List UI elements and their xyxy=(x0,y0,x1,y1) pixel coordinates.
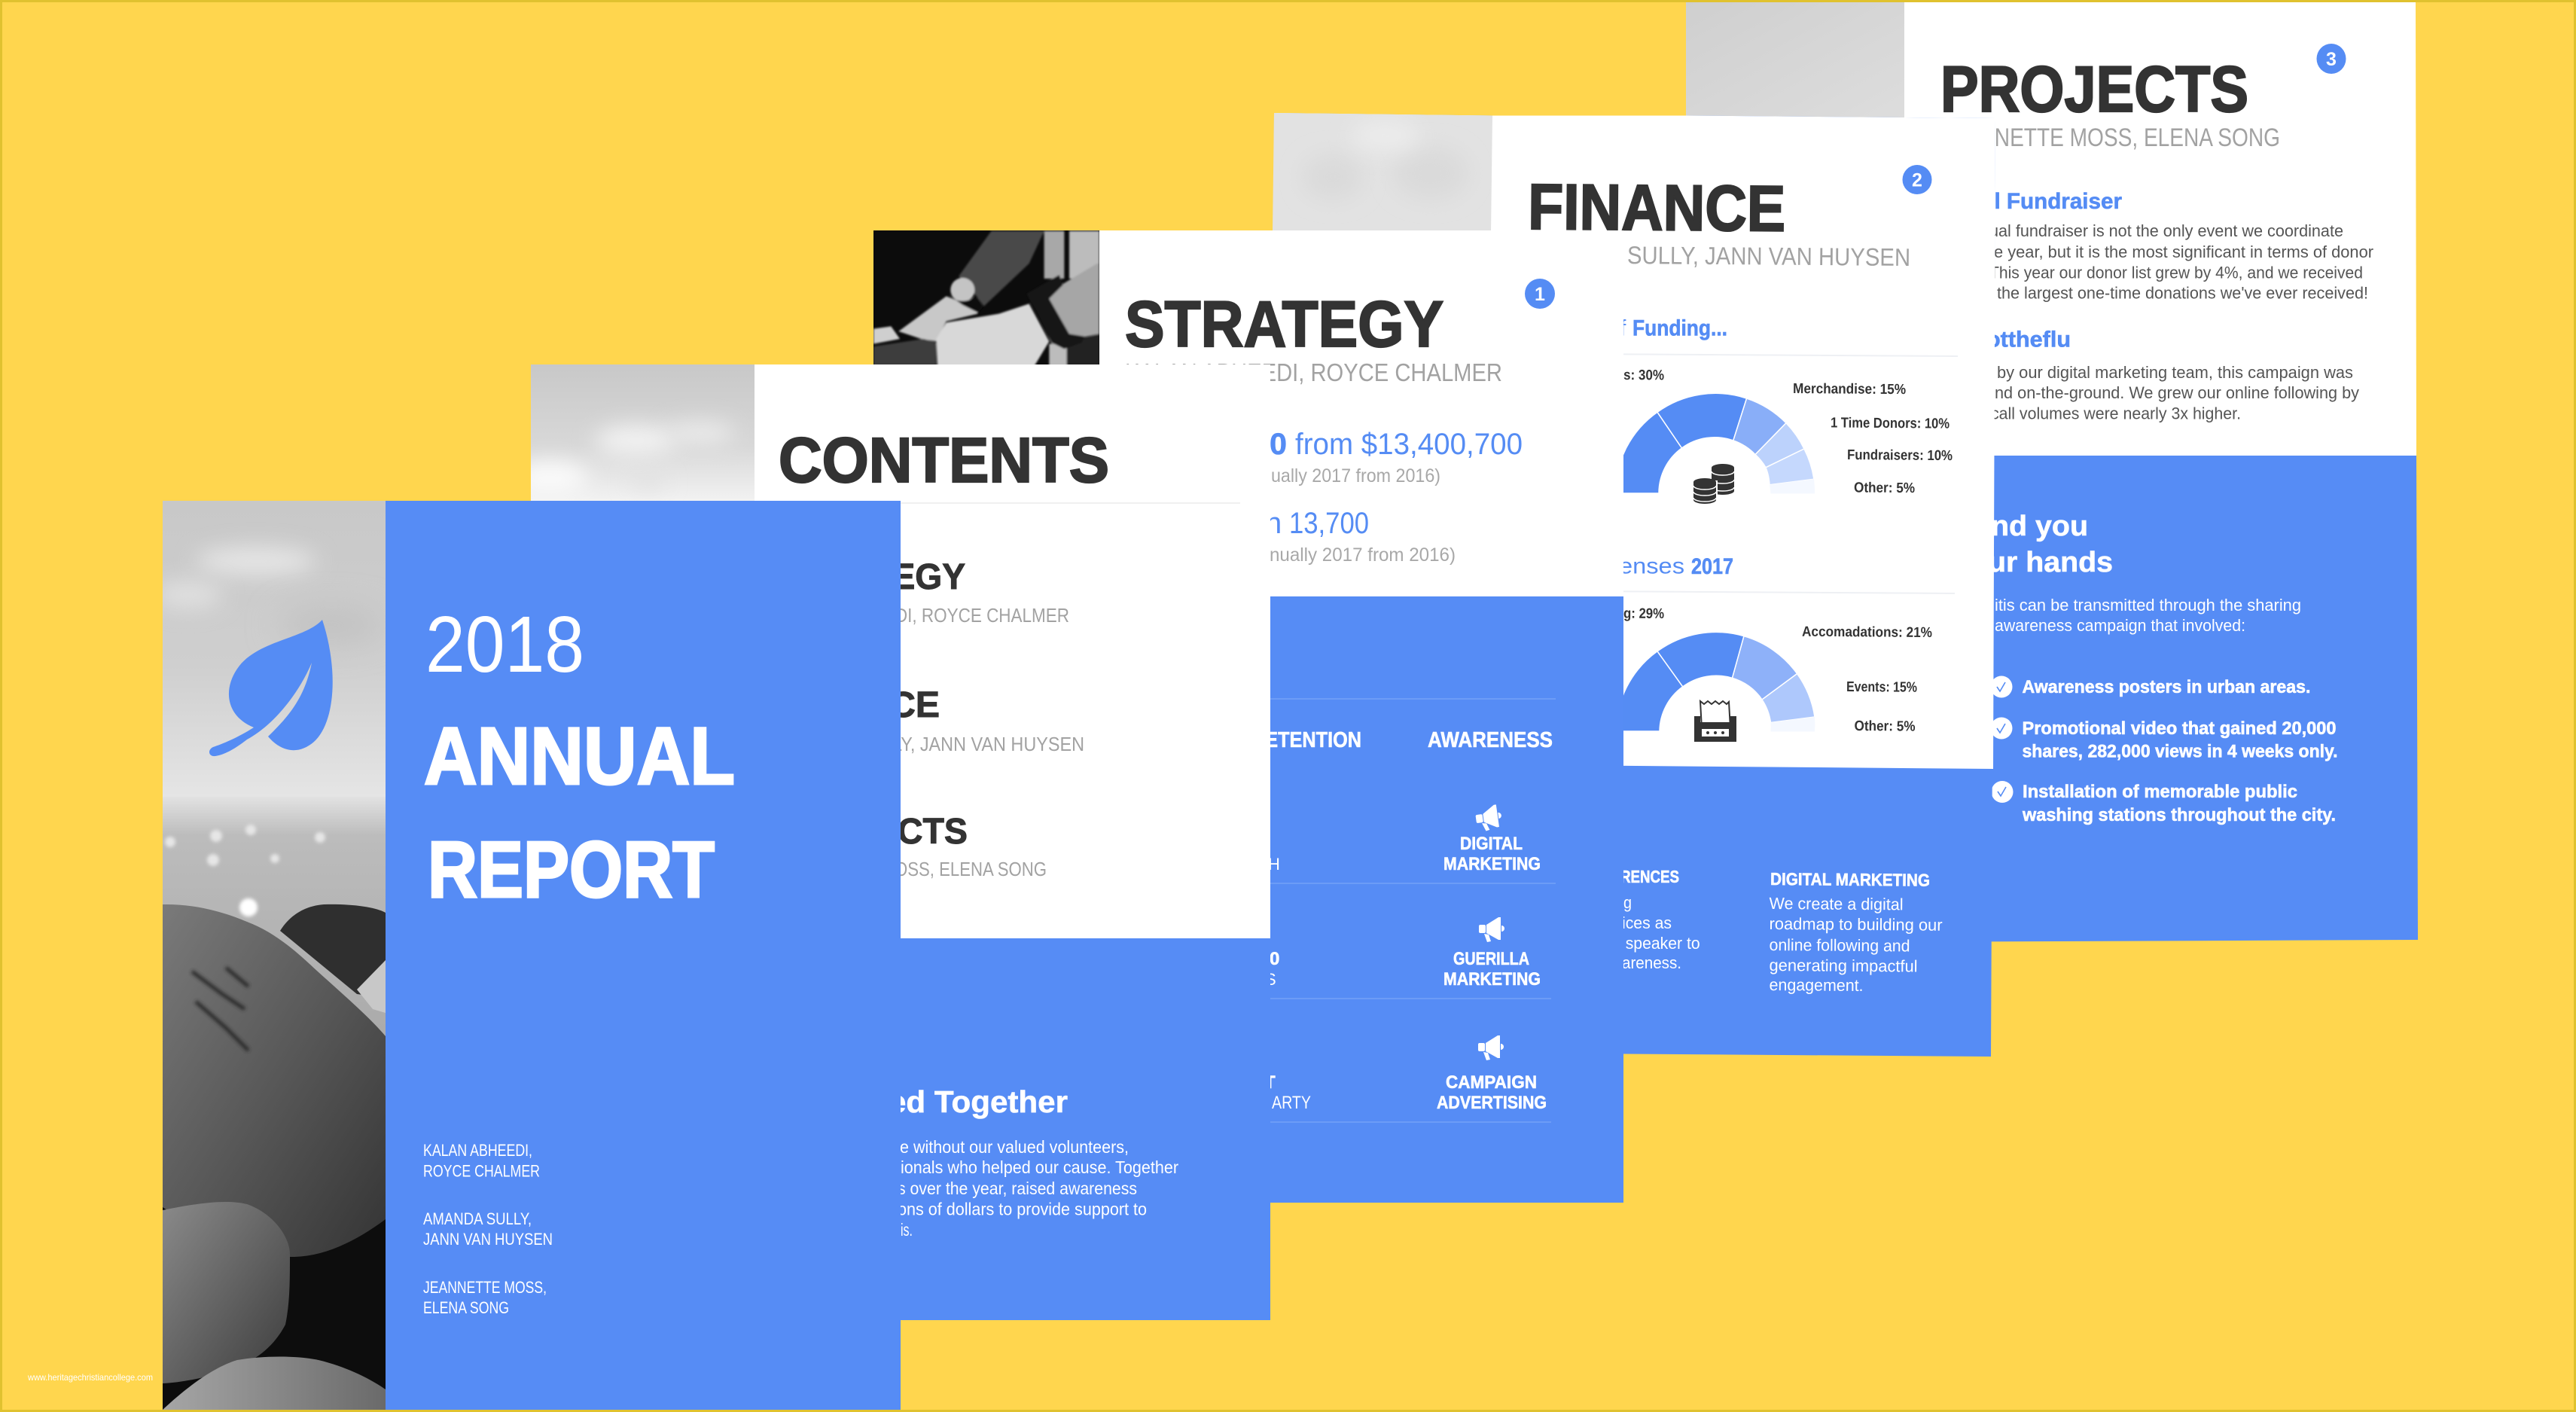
checklist: Awareness posters in urban areas. xyxy=(2023,677,2310,697)
annual fundraiser block: the largest one-time donations we've ever received! xyxy=(1997,283,2368,302)
retention fragments: T xyxy=(1264,1072,1276,1093)
icon: leaf logo xyxy=(209,620,333,756)
number badge 1: 1 xyxy=(1535,284,1545,305)
heading: expenses 2017: enses xyxy=(1619,554,1684,578)
annual fundraiser block: al Fundraiser xyxy=(1982,189,2122,214)
stat: donors total: 13,700 xyxy=(1289,507,1369,540)
strategy authors: KALAN ABHEEDI, ROYCE CHALMER xyxy=(1125,358,1502,386)
number badge 3 xyxy=(2316,44,2346,74)
heading: sources of funding: Funding... xyxy=(1632,316,1727,341)
funding labels: Fundraisers: 10% xyxy=(1847,447,1953,464)
funding labels: Other: 5% xyxy=(1854,480,1915,496)
retention fragments xyxy=(1264,855,1311,1113)
digital marketing column: roadmap to building our xyxy=(1769,914,1943,935)
icon: receipt printer xyxy=(1694,701,1736,742)
retention fragments: H xyxy=(1268,855,1280,874)
title: 2018 annual report: 2018 xyxy=(425,600,584,689)
check icon 2 xyxy=(1991,717,2012,740)
heading: in your hands: nd you xyxy=(1991,511,2088,542)
conferences column: ices as xyxy=(1622,913,1672,932)
finance photo xyxy=(1273,113,1492,230)
icon: megaphone 2 xyxy=(1479,917,1504,942)
digital marketing column: engagement. xyxy=(1769,975,1864,995)
contents item: strategy: STRATEGY xyxy=(779,557,965,597)
conferences column: speaker to xyxy=(1626,934,1700,953)
stat: donors total xyxy=(1265,507,1456,566)
column heading: awareness: AWARENESS xyxy=(1428,728,1553,752)
retention fragments: 0 xyxy=(1270,949,1279,969)
intro text on blue: awareness campaign that involved: xyxy=(1995,616,2245,635)
expense labels: Events: 15% xyxy=(1846,679,1917,696)
stoptheflu block xyxy=(1986,327,2359,423)
contents page sheet xyxy=(531,364,1270,1320)
heading: in your hands xyxy=(1988,511,2113,578)
number badge 2: 2 xyxy=(1912,170,1922,191)
checklist: washing stations throughout the city. xyxy=(2022,805,2336,825)
cover authors: JEANNETTE MOSS, xyxy=(423,1278,547,1297)
check icon 3 xyxy=(1991,781,2014,803)
together paragraph: s over the year, raised awareness xyxy=(898,1179,1137,1198)
cover authors: AMANDA SULLY, xyxy=(423,1209,532,1228)
together paragraph: e without our valued volunteers, xyxy=(900,1137,1129,1157)
stoptheflu block: ottheflu xyxy=(1986,327,2071,352)
conferences column: areness. xyxy=(1622,953,1681,972)
cover blue sheet xyxy=(386,501,901,1410)
heading: finance: FINANCE xyxy=(1528,171,1786,245)
heading: expenses 2017 xyxy=(1619,554,1733,579)
cover authors: KALAN ABHEEDI, xyxy=(423,1141,532,1160)
finance authors: AMANDA SULLY, JANN VAN HUYSEN xyxy=(1528,240,1910,271)
panel: finance page xyxy=(1265,109,1995,1057)
conferences column: RENCES xyxy=(1620,867,1679,886)
chart: sources of funding xyxy=(1615,393,1815,494)
stat: donors total: n xyxy=(1265,507,1282,540)
check icon 1 xyxy=(1991,676,2012,697)
stat: funding total: from $13,400,700 xyxy=(1295,428,1523,461)
intro text on blue xyxy=(1995,596,2301,635)
expense labels: Accomadations: 21% xyxy=(1802,624,1932,641)
finance page sheet xyxy=(1270,113,1995,1057)
title: 2018 annual report: ANNUAL xyxy=(424,710,735,801)
conferences column: g xyxy=(1623,893,1632,912)
retention fragments: ARTY xyxy=(1272,1093,1311,1113)
contents item: finance xyxy=(779,685,1084,755)
together paragraph: ionals who helped our cause. Together xyxy=(901,1157,1178,1177)
checklist: Promotional video that gained 20,000 xyxy=(2023,718,2336,739)
number badge 1 xyxy=(1525,279,1555,309)
item: guerilla marketing: MARKETING xyxy=(1443,969,1541,990)
number badge 3: 3 xyxy=(2326,49,2337,70)
digital marketing column: We create a digital xyxy=(1769,894,1904,913)
contents item: projects: PROJECTS xyxy=(779,812,968,852)
digital marketing column: DIGITAL MARKETING xyxy=(1770,869,1930,890)
item: guerilla marketing: GUERILLA xyxy=(1453,949,1529,969)
annual fundraiser block: e year, but it is the most significant in terms of donor xyxy=(1994,242,2373,261)
annual fundraiser block: This year our donor list grew by 4%, and we received xyxy=(1989,264,2363,282)
together paragraph: is. xyxy=(901,1220,913,1240)
digital marketing column: generating impactful xyxy=(1769,956,1918,976)
contents item: projects: JEANNETTE MOSS, ELENA SONG xyxy=(779,858,1047,880)
contents item: strategy: KALAN ABHEEDI, ROYCE CHALMER xyxy=(779,604,1069,627)
icon: megaphone 1 xyxy=(1474,804,1503,832)
title: 2018 annual report xyxy=(424,600,735,914)
heading: together: ed Together xyxy=(889,1084,1068,1119)
panel: strategy page xyxy=(873,230,1623,1203)
heading: projects: PROJECTS xyxy=(1940,53,2248,126)
stat: funding total xyxy=(1270,428,1523,486)
cover photo: rocks and sea xyxy=(154,501,386,1410)
contents item: projects xyxy=(779,812,1047,880)
strategy page sheet xyxy=(873,230,1623,1203)
checklist: shares, 282,000 views in 4 weeks only. xyxy=(2023,742,2337,762)
icon: coins xyxy=(1692,464,1734,506)
funding labels: 1 Time Donors: 10% xyxy=(1831,415,1950,432)
heading: strategy: STRATEGY xyxy=(1125,288,1443,361)
checklist: Installation of memorable public xyxy=(2023,782,2297,802)
panel: contents page xyxy=(512,364,1270,1320)
icon: megaphone 3 xyxy=(1478,1035,1504,1060)
funding labels xyxy=(1623,367,1953,496)
item: campaign advertising xyxy=(1437,1072,1547,1113)
annual fundraiser block: ual fundraiser is not the only event we coordinate xyxy=(1989,221,2343,240)
contents item: strategy xyxy=(779,557,1069,627)
panel: projects page xyxy=(1686,2,2418,943)
heading: sources of funding: f xyxy=(1620,316,1626,341)
checklist xyxy=(1991,676,2337,825)
projects photo xyxy=(1686,2,1904,120)
cover authors: ROYCE CHALMER xyxy=(423,1161,540,1181)
stoptheflu block: nd on-the-ground. We grew our online following by xyxy=(1995,383,2359,402)
together paragraph xyxy=(898,1137,1178,1240)
strategy photo: hands and watch xyxy=(873,230,1099,367)
heading: contents: CONTENTS xyxy=(779,425,1109,496)
heading: expenses 2017: 2017 xyxy=(1691,554,1733,579)
cover authors: ELENA SONG xyxy=(423,1298,509,1317)
stat: funding total: ually 2017 from 2016) xyxy=(1271,465,1440,486)
item: guerilla marketing xyxy=(1443,949,1541,990)
expense labels xyxy=(1623,606,1932,735)
stat: funding total: 0 xyxy=(1270,428,1287,461)
contents photo: cloudy sky xyxy=(512,364,755,501)
expense labels: g: 29% xyxy=(1623,606,1664,622)
column heading: retention: RETENTION xyxy=(1251,728,1361,752)
expense labels: Other: 5% xyxy=(1854,718,1916,735)
item: campaign advertising: CAMPAIGN xyxy=(1446,1072,1537,1093)
panel: cover page xyxy=(27,501,901,1410)
projects authors: JEANNETTE MOSS, ELENA SONG xyxy=(1940,124,2280,152)
annual fundraiser block xyxy=(1982,189,2373,302)
heading: in your hands: ur hands xyxy=(1988,547,2113,578)
together paragraph: ons of dollars to provide support to xyxy=(898,1199,1147,1218)
funding labels: s: 30% xyxy=(1623,367,1664,383)
stoptheflu block: by our digital marketing team, this campaign was xyxy=(1997,363,2353,382)
item: digital marketing: MARKETING xyxy=(1443,854,1541,874)
title: 2018 annual report: REPORT xyxy=(428,825,715,914)
stoptheflu block: call volumes were nearly 3x higher. xyxy=(1991,404,2241,423)
cover authors xyxy=(423,1141,553,1317)
watermark: www.heritagechristiancollege.com xyxy=(27,1372,153,1383)
stat: donors total: nually 2017 from 2016) xyxy=(1270,544,1456,566)
digital marketing column xyxy=(1769,869,1943,995)
cover authors: JANN VAN HUYSEN xyxy=(423,1230,553,1249)
digital marketing column: online following and xyxy=(1769,935,1910,955)
contents item: finance: FINANCE xyxy=(779,685,940,725)
projects page sheet xyxy=(1686,2,2418,943)
item: digital marketing: DIGITAL xyxy=(1460,834,1523,854)
number badge 2 xyxy=(1902,165,1932,194)
item: digital marketing xyxy=(1443,834,1541,874)
chart: expenses xyxy=(1616,632,1815,732)
intro text on blue: itis can be transmitted through the sharing xyxy=(1995,596,2301,615)
conferences column xyxy=(1620,867,1700,972)
contents item: finance: AMANDA SULLY, JANN VAN HUYSEN xyxy=(779,733,1084,755)
item: campaign advertising: ADVERTISING xyxy=(1437,1093,1547,1113)
funding labels: Merchandise: 15% xyxy=(1793,381,1906,398)
retention fragments: S xyxy=(1265,970,1276,989)
